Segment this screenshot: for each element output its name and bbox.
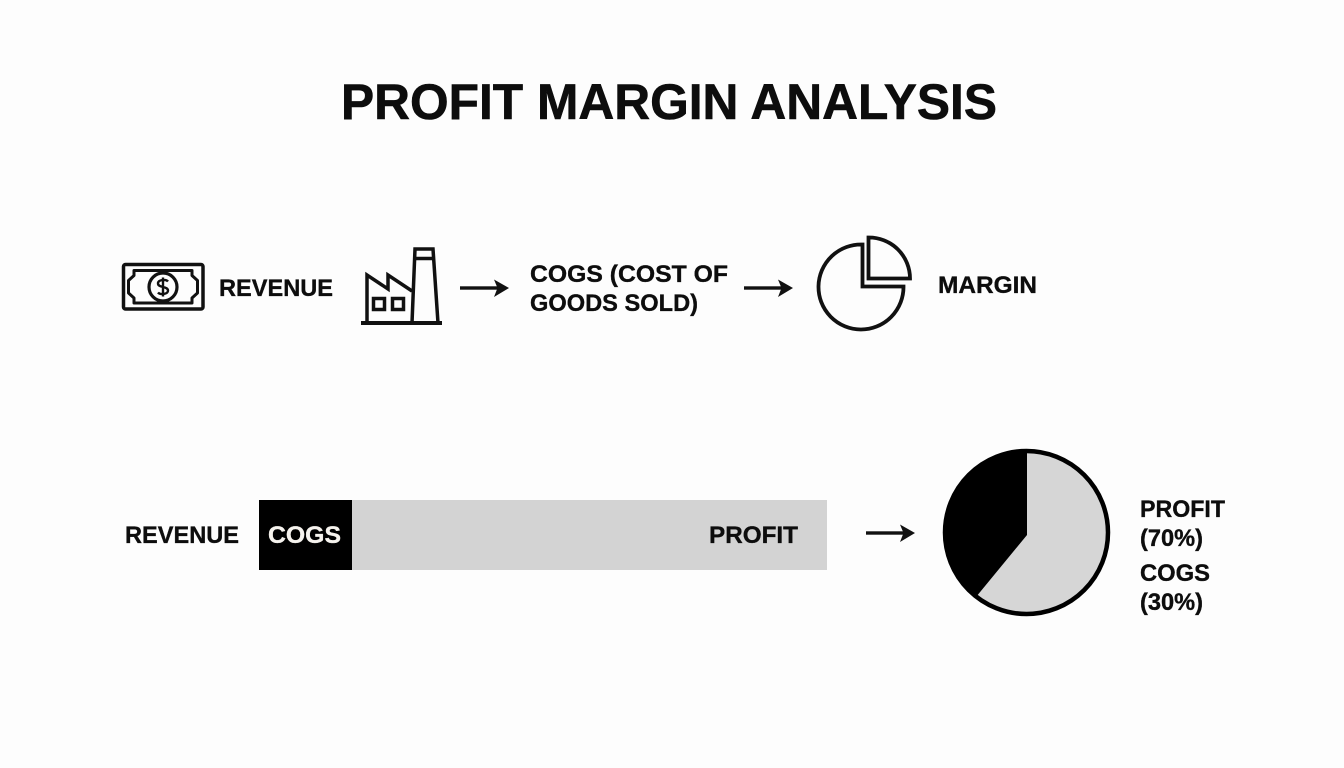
bar segment: COGS (259, 500, 352, 570)
label: revenue row: REVENUE (125, 522, 239, 549)
bar segment: COGS: COGS (268, 522, 341, 549)
icon: factory (361, 249, 442, 323)
bar segment: profit: PROFIT (709, 522, 798, 549)
legend: (30%) (1140, 589, 1203, 616)
label: margin: MARGIN (938, 272, 1037, 299)
label: COGS definition: COGS (COST OF (530, 261, 728, 288)
label: revenue: REVENUE (219, 275, 333, 302)
title: PROFIT MARGIN ANALYSIS (341, 74, 997, 130)
icon: pie chart with slice (819, 237, 910, 329)
stacked bar (259, 500, 827, 570)
arrow: COGS to margin (744, 280, 793, 297)
legend: (70%) (1140, 525, 1203, 552)
legend: PROFIT (1140, 496, 1225, 523)
legend (1140, 496, 1225, 616)
pie chart (945, 450, 1108, 614)
panel: revenue breakdown (125, 450, 1225, 616)
panel: top process flow (124, 237, 1037, 329)
arrow: factory to COGS (460, 280, 509, 297)
label: COGS definition: GOODS SOLD) (530, 290, 698, 317)
bar segment: profit (352, 500, 827, 570)
legend: COGS (1140, 560, 1210, 587)
arrow: bar to pie (866, 524, 915, 542)
icon: banknote (124, 264, 203, 309)
label: COGS definition (530, 261, 728, 317)
